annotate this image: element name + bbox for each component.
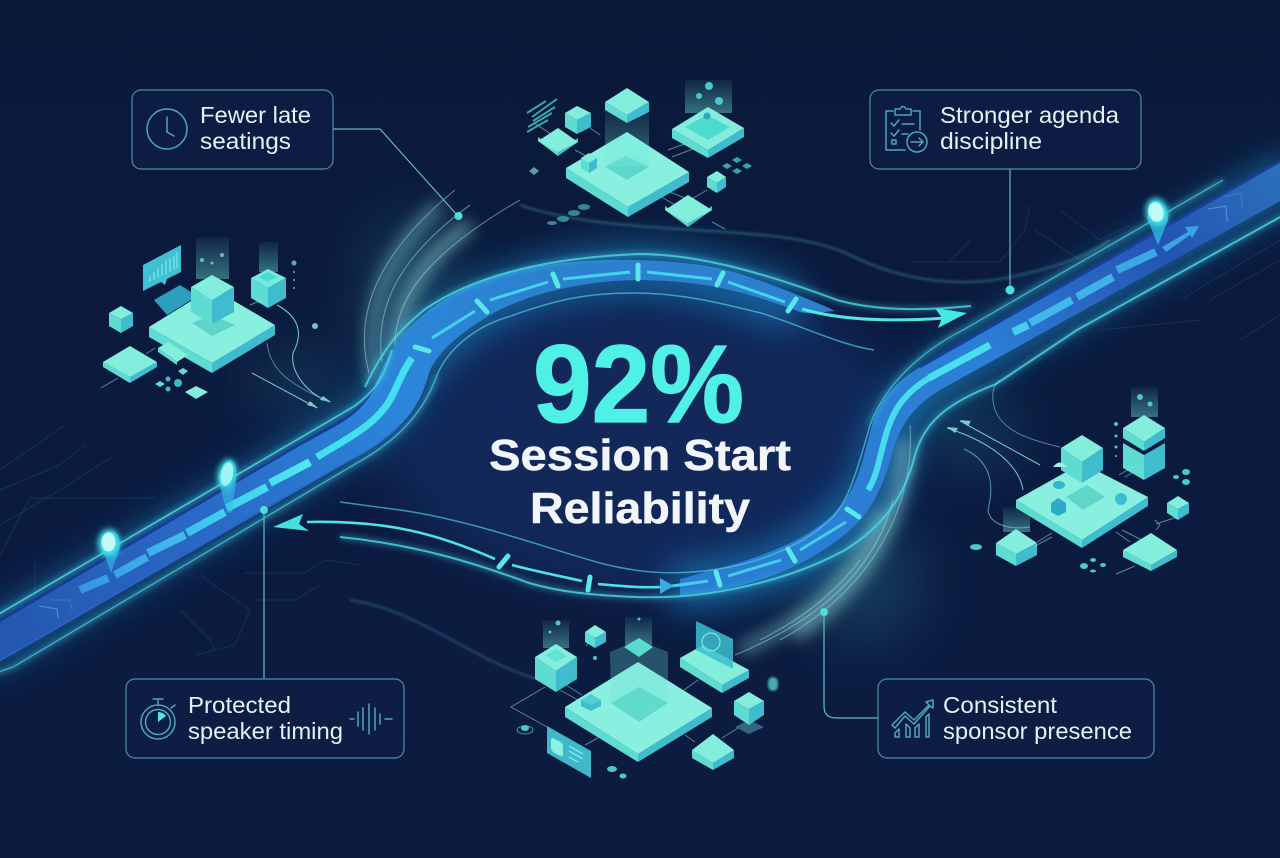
icon: clipboard bbox=[886, 106, 927, 152]
small cube bbox=[565, 106, 591, 120]
bottom right slab bbox=[665, 206, 688, 227]
central title: Reliability bbox=[530, 484, 751, 533]
cube on slab bbox=[581, 153, 597, 163]
arrow head bottom left bbox=[273, 514, 309, 531]
bottom left cube bbox=[996, 529, 1037, 554]
central metric: 92%: 92% bbox=[533, 323, 744, 446]
callout: fewer late seatings bbox=[132, 90, 462, 220]
main slab bbox=[566, 168, 628, 217]
right cube bbox=[707, 171, 726, 183]
right platform bbox=[685, 80, 732, 113]
callout: fewer late seatings: seatings bbox=[200, 128, 291, 154]
floating cube bbox=[605, 88, 649, 115]
circuit traces background bbox=[0, 205, 1280, 655]
location pin 3 bbox=[1143, 196, 1171, 245]
icon: clock bbox=[147, 109, 187, 149]
icon: growth chart bbox=[892, 700, 933, 737]
right slab with panel bbox=[680, 658, 722, 693]
callout: protected speaker timing bbox=[126, 506, 404, 758]
callout: stronger agenda discipline: Stronger agenda bbox=[940, 102, 1119, 128]
road chevrons bbox=[39, 193, 1242, 618]
glass cube bbox=[610, 640, 668, 722]
rail glow bbox=[340, 180, 1280, 597]
callout: consistent sponsor presence: sponsor presence bbox=[943, 718, 1132, 744]
flow arrows bbox=[947, 380, 1060, 528]
icon: stopwatch bbox=[141, 699, 175, 739]
rails bbox=[340, 180, 1223, 573]
bottom left slab bbox=[103, 362, 130, 383]
location pin 2 bbox=[215, 457, 239, 513]
small chevron bottom bbox=[660, 578, 674, 594]
callout: stronger agenda discipline bbox=[870, 90, 1141, 294]
road arrow bbox=[1162, 226, 1199, 252]
central title bbox=[489, 431, 791, 533]
road surface left bbox=[0, 260, 835, 672]
main cube bbox=[191, 275, 234, 300]
rear block bbox=[154, 285, 191, 315]
callout: protected speaker timing: speaker timing bbox=[188, 718, 343, 744]
bottom right slab bbox=[1123, 550, 1151, 571]
isometric cluster: top bbox=[527, 80, 752, 229]
bits bbox=[722, 157, 752, 174]
flow arrows bbox=[252, 305, 330, 408]
lane dashes bbox=[80, 462, 310, 590]
isometric cluster: right bbox=[947, 380, 1190, 574]
small on slab bbox=[581, 694, 601, 705]
rail glow bbox=[0, 254, 971, 675]
callout: consistent sponsor presence: Consistent bbox=[943, 692, 1058, 718]
location pin 1 bbox=[98, 529, 120, 573]
left cube bbox=[109, 306, 133, 319]
callout: stronger agenda discipline: discipline bbox=[940, 128, 1042, 154]
road: left diagonal and top loop bbox=[0, 254, 971, 675]
callout: protected speaker timing: Protected bbox=[188, 692, 291, 718]
cube on slab bbox=[1061, 435, 1103, 462]
bits bbox=[521, 618, 640, 778]
arrow head top bbox=[935, 308, 967, 328]
bits bbox=[155, 381, 165, 387]
lines bbox=[534, 123, 725, 229]
glow around route bbox=[0, 172, 1280, 652]
road surface right bbox=[680, 150, 1280, 595]
isometric cluster: left bbox=[101, 237, 331, 408]
main slab bbox=[149, 327, 212, 373]
wispy light streams bbox=[350, 190, 1110, 680]
right cube bbox=[251, 269, 286, 288]
central title: Session Start bbox=[489, 431, 791, 480]
callout: fewer late seatings: Fewer late bbox=[200, 102, 311, 128]
callout: consistent sponsor presence bbox=[820, 608, 1154, 758]
right small cube bbox=[1167, 496, 1189, 509]
left slab bbox=[538, 137, 558, 156]
stacked top cube bbox=[1123, 415, 1165, 442]
isometric cluster: bottom bbox=[511, 617, 778, 778]
bottom loop ticks bbox=[499, 509, 859, 590]
solid lane bbox=[317, 358, 412, 457]
road: right diagonal and bottom loop bbox=[273, 150, 1280, 597]
stacked lower cube bbox=[1123, 443, 1144, 480]
icon: sound wave bbox=[350, 704, 392, 734]
main slab bbox=[1016, 500, 1082, 548]
top loop ticks bbox=[415, 265, 796, 351]
teal haze behind streams bbox=[250, 215, 1015, 640]
lane dashes right bbox=[929, 252, 1156, 378]
rails bbox=[0, 350, 392, 625]
dark edge bbox=[0, 385, 375, 632]
chart panel bbox=[143, 245, 181, 291]
small objects bbox=[1051, 498, 1066, 516]
right cube bbox=[735, 720, 764, 734]
card bbox=[547, 726, 591, 778]
main slab bbox=[565, 707, 638, 762]
small top cube bbox=[585, 625, 606, 638]
lower right cube bbox=[692, 750, 713, 770]
bright return line bbox=[307, 522, 660, 587]
left cube bbox=[535, 644, 577, 671]
